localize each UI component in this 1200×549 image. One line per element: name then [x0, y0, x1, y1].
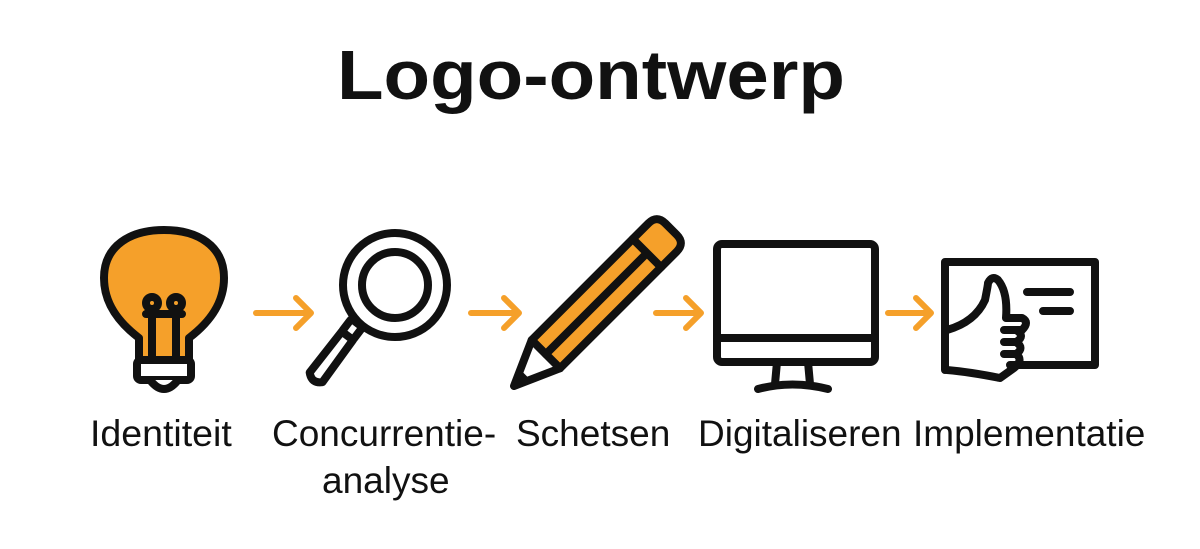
label: Identiteit: Identiteit — [90, 412, 232, 454]
icon: light bulb — [104, 230, 224, 389]
arrow 1 — [256, 298, 311, 328]
icon: magnifier — [307, 233, 447, 385]
label: Implementatie: Implementatie — [913, 413, 1145, 454]
label: Concurrentie-analyse: analyse — [322, 460, 450, 501]
icon: thumbs-up card — [945, 262, 1095, 378]
label: Digitaliseren: Digitaliseren — [698, 413, 902, 454]
arrow 2 — [471, 298, 519, 328]
label: Schetsen: Schetsen — [516, 413, 670, 454]
arrow 4 — [888, 298, 931, 328]
arrow 3 — [656, 298, 701, 328]
label: Concurrentie-analyse — [272, 413, 496, 501]
icon: pencil — [500, 215, 685, 400]
icon: monitor — [717, 244, 875, 389]
title: Logo-ontwerp — [337, 36, 845, 114]
label: Concurrentie-analyse: Concurrentie- — [272, 413, 496, 454]
